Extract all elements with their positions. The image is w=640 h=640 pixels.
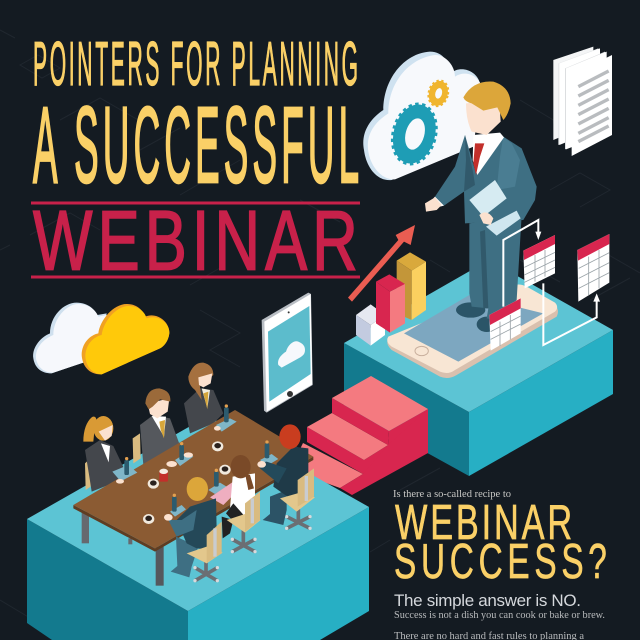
red cup xyxy=(159,469,168,482)
heading: success: SUCCESS? xyxy=(394,534,607,589)
attendee: long-hair woman xyxy=(184,363,223,433)
shoes xyxy=(456,302,497,332)
attendee: man xyxy=(140,388,182,465)
table top xyxy=(73,410,313,552)
jacket xyxy=(435,135,537,223)
attendee: red-hair man with chair xyxy=(257,424,315,530)
flow connectors xyxy=(503,220,600,345)
folder xyxy=(469,180,521,236)
data table card middle xyxy=(523,235,555,288)
attendee: woman in pink with chair xyxy=(210,455,261,553)
data table card front xyxy=(489,298,521,351)
icon: gold gear xyxy=(426,79,451,108)
growth arrow xyxy=(348,225,415,302)
title rule upper xyxy=(31,202,360,204)
intro question: Is there a so-called recipe to xyxy=(393,489,511,500)
trousers xyxy=(469,215,522,320)
shirt and tie xyxy=(473,133,504,175)
icon: cloud with gears xyxy=(363,52,482,180)
white bar xyxy=(356,304,385,346)
tablet with cloud xyxy=(262,293,313,413)
coffee cups xyxy=(143,441,231,524)
title rule lower xyxy=(31,276,360,278)
attendee: blond man with chair xyxy=(164,477,223,582)
title xyxy=(31,29,360,288)
body line one: Success is not a dish you can cook or bake or brew. xyxy=(394,610,605,621)
man in suit xyxy=(425,82,537,332)
seated attendees front row xyxy=(164,424,315,582)
heading: webinar: WEBINAR xyxy=(395,495,572,549)
tablets with mini figures xyxy=(112,404,278,517)
meeting table xyxy=(73,404,313,586)
pointing hand xyxy=(425,197,444,212)
seated attendees back row xyxy=(83,363,223,492)
head and hair xyxy=(463,82,511,135)
icon: teal gear xyxy=(387,100,442,168)
right isometric platform xyxy=(344,260,613,476)
data table card right xyxy=(577,234,609,302)
title line: webinar: WEBINAR xyxy=(33,194,358,288)
answer: The simple answer is NO. xyxy=(394,591,581,610)
text block: webinar success xyxy=(393,489,607,640)
title line: a successful: A SUCCESSFUL xyxy=(33,86,359,206)
white cloud xyxy=(33,303,107,373)
table legs xyxy=(82,512,164,586)
phone on platform xyxy=(387,284,558,378)
yellow cloud xyxy=(82,304,169,374)
red bar xyxy=(376,274,405,333)
chairs xyxy=(85,433,141,490)
pink stairs xyxy=(290,376,428,495)
icon: paper document stack xyxy=(553,47,612,156)
left isometric platform xyxy=(27,416,369,640)
bar chart with arrow xyxy=(348,225,426,346)
attendee: ponytail woman xyxy=(83,416,124,492)
attendee hands xyxy=(116,426,221,484)
title line: pointers for planning: POINTERS FOR PLANNING xyxy=(33,29,358,98)
yellow bar xyxy=(397,252,426,320)
